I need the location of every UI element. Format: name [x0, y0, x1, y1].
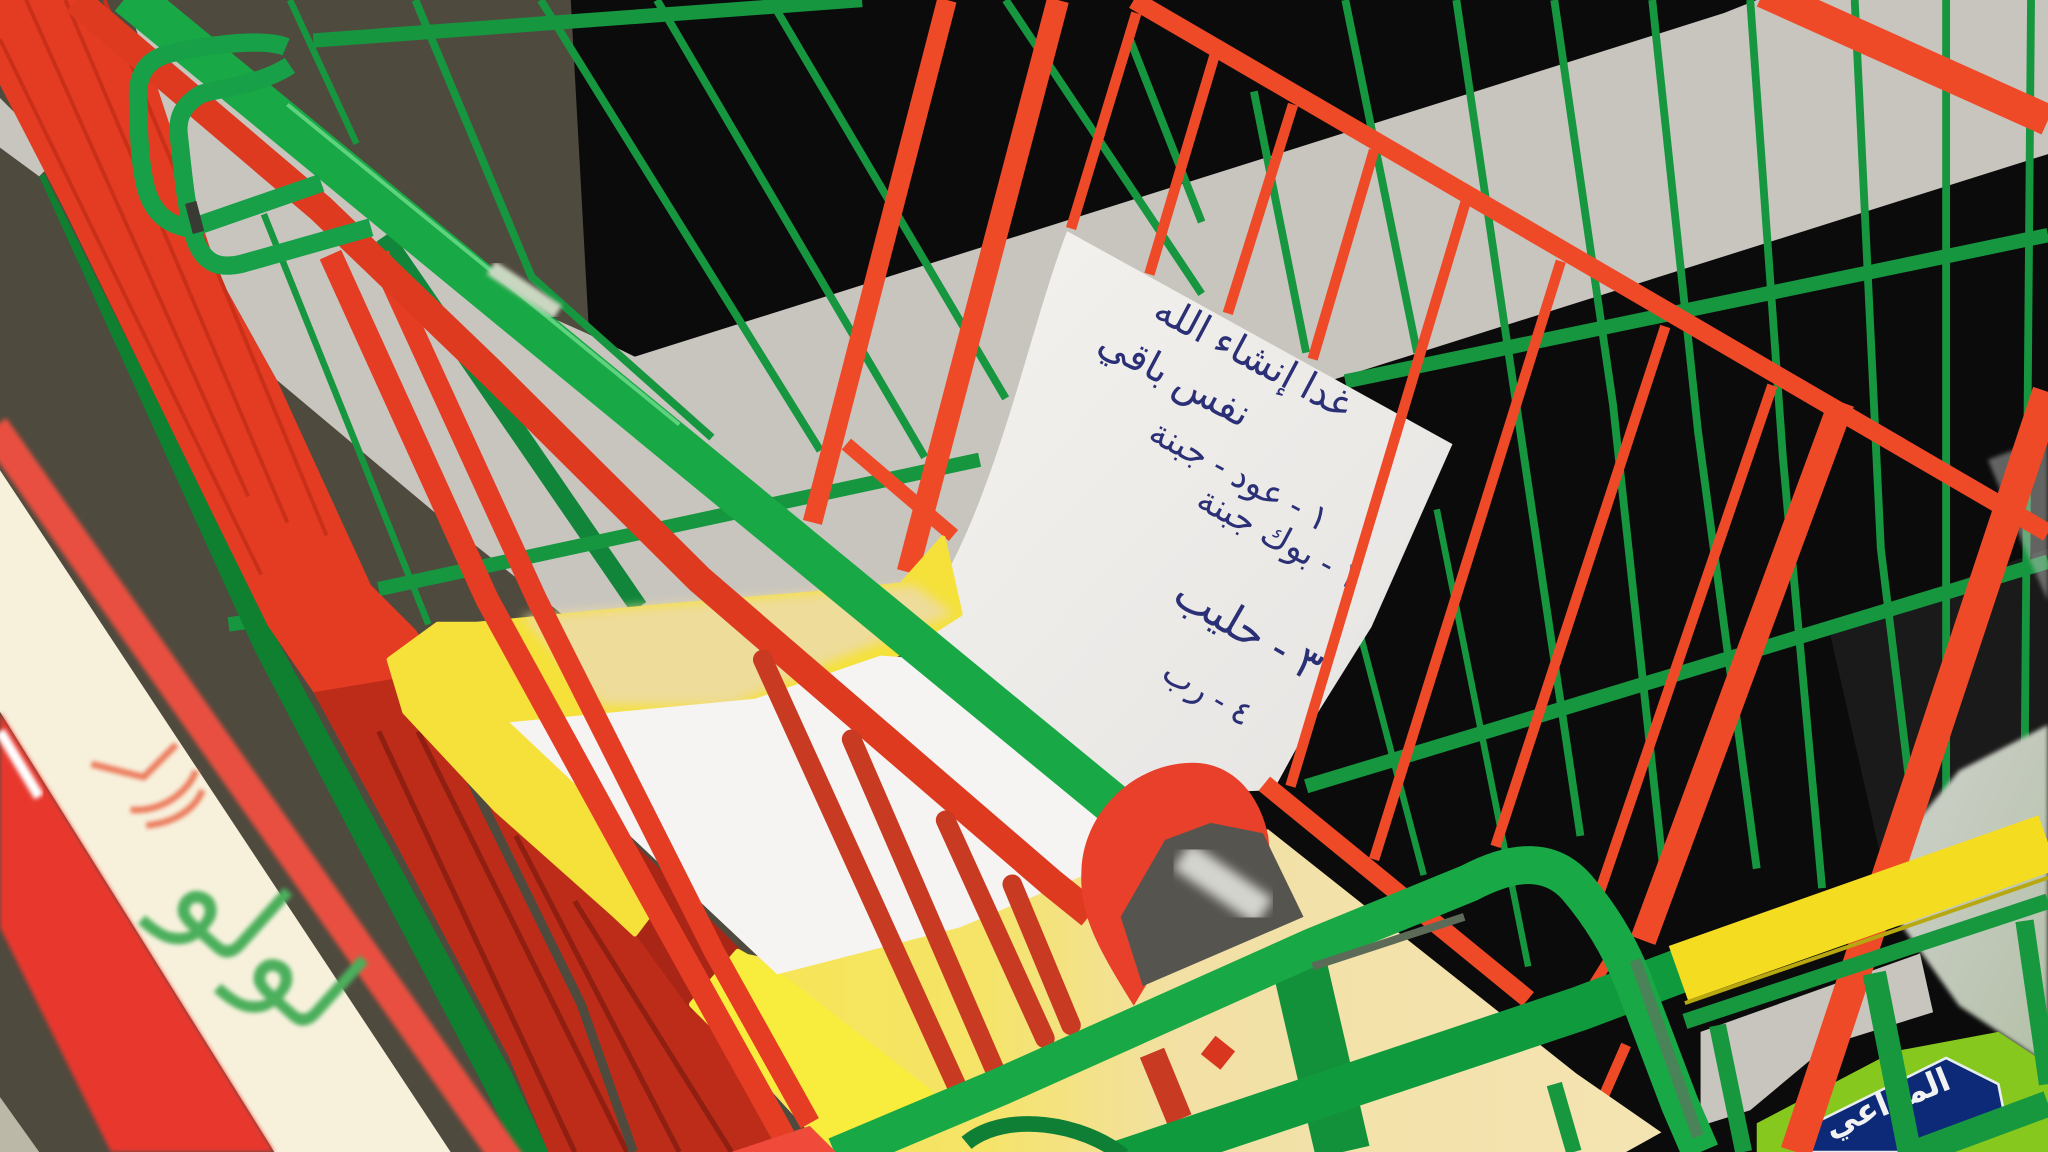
back red wires behind note [812, 0, 1374, 572]
note line: item three: ٣ - حليب [1165, 568, 1331, 692]
red bumper at bottom [731, 1126, 836, 1152]
red knob with metal axle [1081, 763, 1304, 1061]
front-of-note red wires [1264, 202, 2048, 1152]
front left tray [0, 427, 516, 1152]
dark red gap behind envelope [627, 836, 751, 1012]
green product package with blue label [1757, 1032, 2048, 1152]
worn patch on green rail [491, 268, 558, 312]
back sheet of paper [1306, 392, 1452, 731]
red wire fan [0, 0, 829, 1152]
note line: item one: ١ - عود - جبنة [1142, 412, 1336, 540]
green handle loop [138, 43, 371, 266]
left dark green stripe [39, 174, 549, 1152]
green vertical post [1298, 960, 1343, 1152]
back green wires [229, 0, 2048, 967]
note line: second heading: نفس باقي [1091, 320, 1258, 437]
front green rail [128, 0, 1123, 812]
stained seat area [522, 585, 953, 705]
bright yellow seat corner [692, 952, 930, 1139]
handwritten shopping note [914, 231, 1452, 797]
rear yellow seat [389, 538, 960, 934]
note line: item four: ٤ - رب [1156, 653, 1259, 734]
lower yellow seat [692, 829, 1661, 1152]
green bars under handle [1554, 901, 2048, 1152]
bottom green wheel guard [967, 1124, 1123, 1152]
green rail highlight [287, 104, 679, 424]
top red rim [1134, 0, 2048, 533]
yellow handle bar [1678, 842, 2048, 1003]
note line: heading: غدا إنشاء الله [1147, 287, 1359, 428]
white envelope [509, 656, 1110, 974]
tray brand text: لولو [137, 818, 388, 1064]
red rods over rear seat [330, 255, 810, 1136]
tray logo [91, 744, 202, 825]
small plastic scrap at right edge [1988, 438, 2048, 601]
curved green handle [836, 865, 1701, 1152]
front red rail [76, 0, 1091, 914]
note line: item two: ١ - بوك جبنة [1190, 479, 1367, 599]
grey plastic bag [1894, 725, 2048, 1064]
lower green rail [1121, 967, 1691, 1152]
package label text: المراعي [1819, 1060, 1956, 1145]
small red rods over seat [763, 660, 1179, 1119]
